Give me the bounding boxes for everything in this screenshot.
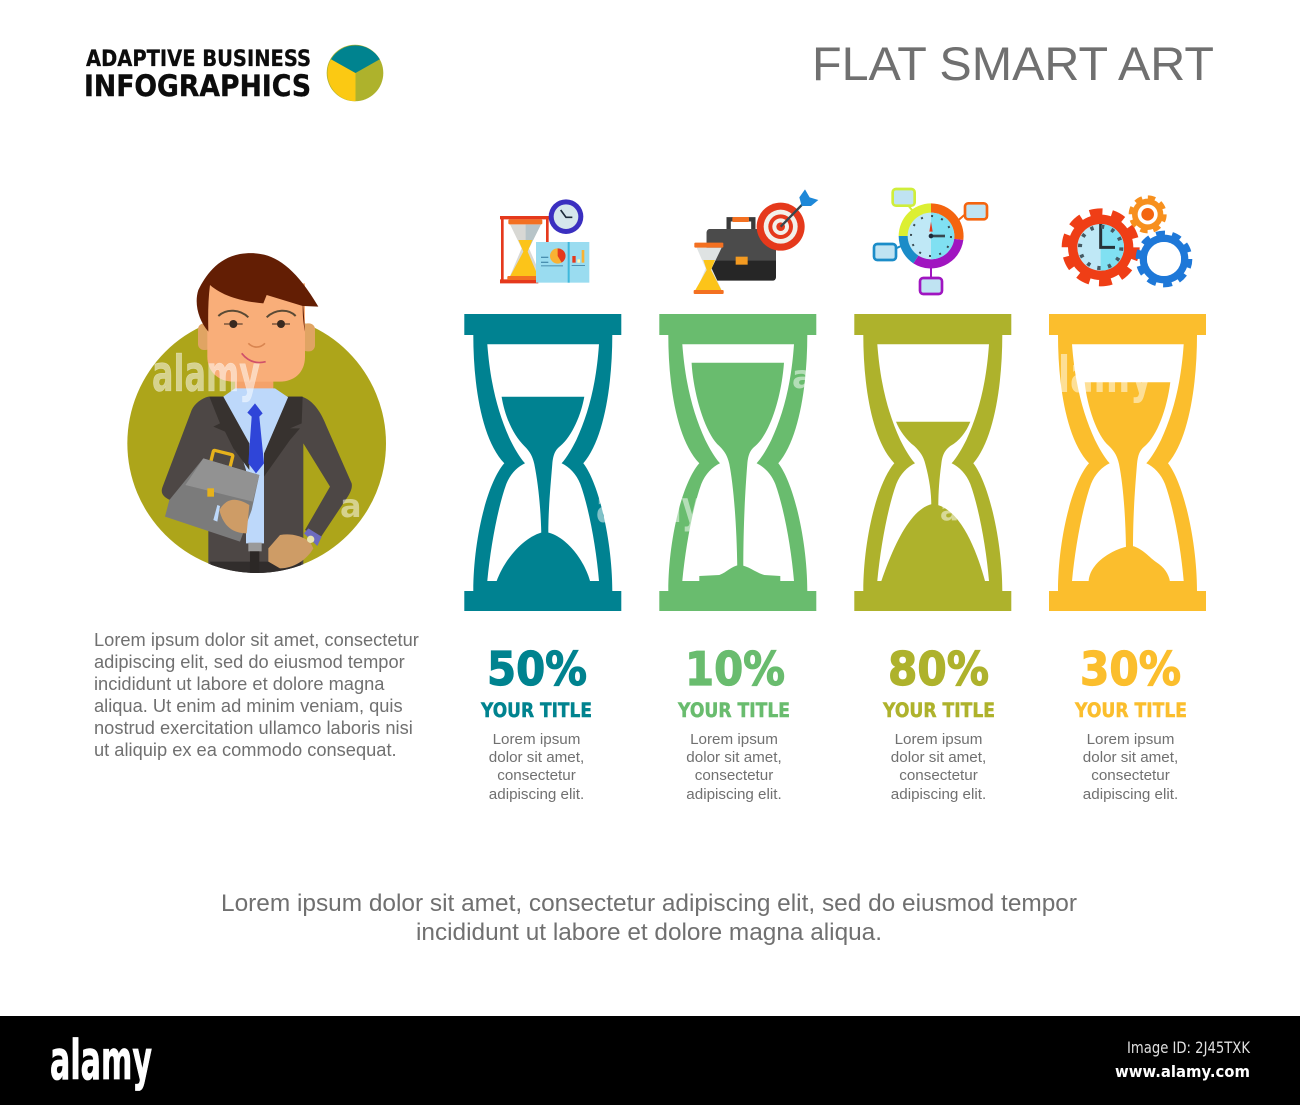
- hair: [197, 253, 318, 332]
- left paragraph: adipiscing elit, sed do eiusmod tempor: [94, 651, 405, 672]
- left paragraph: [94, 629, 419, 760]
- red gear: [1067, 214, 1134, 281]
- watermark on hourglasses: alamy: [596, 482, 702, 533]
- briefcase: [165, 450, 259, 542]
- face: [207, 283, 305, 382]
- bottom caption: Lorem ipsum dolor sit amet, consectetur adipiscing elit, sed do eiusmod tempor: [221, 890, 1077, 917]
- arrow: [781, 202, 805, 227]
- clock face: [908, 213, 954, 259]
- icon: hourglass with clock and dashboard: [500, 199, 589, 283]
- description: consectetur: [899, 767, 978, 784]
- clock: [549, 199, 583, 234]
- left paragraph: Lorem ipsum dolor sit amet, consectetur: [94, 629, 419, 650]
- icon: clock with four linked boxes: [874, 189, 987, 294]
- column 3: 80%: [882, 642, 995, 803]
- briefcase: [729, 219, 753, 230]
- blue gear: [1139, 234, 1189, 284]
- url: www.alamy.com: [1115, 1062, 1250, 1081]
- orange gear: [1131, 198, 1164, 231]
- lower sand: [1089, 546, 1170, 582]
- description: consectetur: [695, 767, 773, 784]
- hand on hip: [268, 534, 313, 568]
- eyes: [229, 320, 237, 328]
- lower sand: [881, 504, 985, 582]
- description: [686, 731, 782, 803]
- eyebrows: [218, 311, 296, 317]
- icon: briefcase, target and hourglass: [694, 189, 818, 294]
- belt: [248, 543, 262, 551]
- watch: [304, 528, 322, 546]
- description: adipiscing elit.: [489, 786, 584, 803]
- lower sand: [496, 532, 590, 582]
- image id: Image ID: 2J45TXK: [1127, 1038, 1250, 1057]
- upper sand: [896, 422, 970, 506]
- description: adipiscing elit.: [891, 786, 986, 803]
- value: 50%: [487, 642, 587, 696]
- target: [757, 203, 805, 251]
- upper sand: [692, 363, 784, 569]
- column 2: 10%: [677, 642, 790, 803]
- description: dolor sit amet,: [686, 749, 782, 766]
- alamy logo: alamy: [50, 1029, 152, 1092]
- tie: [247, 403, 264, 473]
- column title: YOUR TITLE: [480, 699, 592, 722]
- backdrop circle: [127, 314, 386, 573]
- connectors: [908, 206, 913, 212]
- illustration: businessman with briefcase in circle: [127, 253, 386, 575]
- description: dolor sit amet,: [1083, 749, 1178, 766]
- watermark on hourglasses: a: [940, 494, 959, 527]
- column title: YOUR TITLE: [1074, 699, 1187, 722]
- description: Lorem ipsum: [1087, 731, 1174, 748]
- description: dolor sit amet,: [891, 749, 986, 766]
- upper sand: [502, 397, 584, 534]
- watermark on illustration: a: [340, 487, 362, 525]
- icon: clock gears: [1067, 198, 1189, 284]
- glass: [510, 224, 541, 276]
- value: 30%: [1080, 642, 1181, 696]
- description: Lorem ipsum: [493, 731, 580, 748]
- left paragraph: ut aliquip ex ea commodo consequat.: [94, 739, 397, 760]
- description: [1083, 731, 1178, 803]
- shirt: [223, 388, 288, 543]
- small hourglass: [697, 248, 722, 290]
- lower sand: [699, 565, 780, 582]
- watermark on hourglasses: [596, 346, 1153, 533]
- description: dolor sit amet,: [489, 749, 584, 766]
- column 4: 30%: [1074, 642, 1187, 803]
- left paragraph: incididunt ut labore et dolore magna: [94, 673, 385, 694]
- description: Lorem ipsum: [690, 731, 778, 748]
- ears: [198, 324, 208, 350]
- hourglass: green 10%: [659, 314, 816, 611]
- description: [891, 731, 986, 803]
- stand: [500, 216, 550, 283]
- hand holding case: [219, 500, 249, 533]
- hourglass: teal 50%: [464, 314, 621, 611]
- description: consectetur: [497, 767, 576, 784]
- watermark on illustration: alamy: [152, 345, 260, 403]
- logo pie icon: [327, 45, 383, 101]
- watermark on hourglasses: a: [792, 358, 814, 396]
- column title: YOUR TITLE: [882, 699, 995, 722]
- bottom caption: [221, 890, 1077, 946]
- hourglass: yellow 30%: [1049, 314, 1206, 611]
- value: 80%: [888, 642, 989, 696]
- jacket: [162, 397, 352, 573]
- logo: Adaptive Business Infographics: [84, 45, 383, 103]
- upper sand: [1085, 382, 1170, 549]
- linked boxes: [893, 189, 915, 206]
- watermark on illustration: [152, 345, 362, 525]
- lapels: [209, 397, 249, 470]
- footer bar: [0, 1016, 1300, 1105]
- logo text line 1: ADAPTIVE BUSINESS: [86, 47, 311, 72]
- watermark on hourglasses: lamy: [1058, 346, 1153, 404]
- ring segments: [931, 203, 964, 240]
- left paragraph: nostrud exercitation ullamco laboris nisi: [94, 717, 413, 738]
- left paragraph: aliqua. Ut enim ad minim veniam, quis: [94, 695, 403, 716]
- title: FLAT SMART ART: [812, 38, 1214, 91]
- description: adipiscing elit.: [686, 786, 782, 803]
- nose and mouth: [248, 343, 265, 347]
- bottom caption: incididunt ut labore et dolore magna aliqua.: [416, 919, 882, 946]
- neck: [235, 382, 274, 388]
- column 1: 50%: [480, 642, 592, 803]
- logo text line 2: INFOGRAPHICS: [84, 69, 311, 103]
- column title: YOUR TITLE: [677, 699, 790, 722]
- dashboard: [536, 242, 589, 283]
- description: [489, 731, 584, 803]
- description: Lorem ipsum: [895, 731, 982, 748]
- hourglass: olive 80%: [854, 314, 1011, 611]
- description: adipiscing elit.: [1083, 786, 1178, 803]
- jacket bottom: [210, 562, 302, 573]
- description: consectetur: [1091, 767, 1170, 784]
- value: 10%: [685, 642, 785, 696]
